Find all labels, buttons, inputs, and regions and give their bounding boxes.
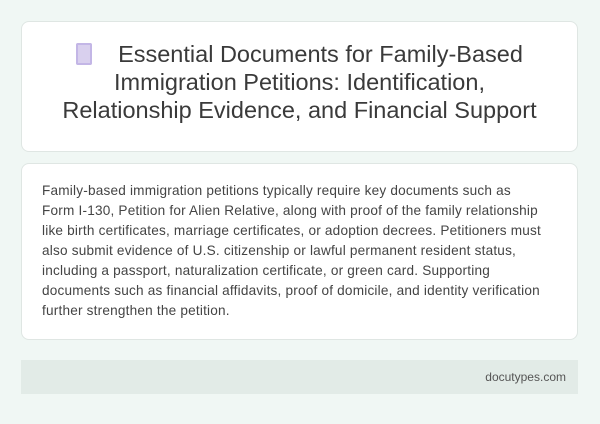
- title: [62, 41, 537, 123]
- text block: Form I-130, Petition for Alien Relative, along with proof of the family relationship: [42, 203, 538, 218]
- text block: like birth certificates, marriage certificates, or adoption decrees. Petitioners must: [42, 223, 541, 238]
- text block: including a passport, naturalization certificate, or green card. Supporting: [42, 263, 490, 278]
- text block: Family-based immigration petitions typically require key documents such as: [42, 183, 511, 198]
- title: Immigration Petitions: Identification,: [114, 69, 485, 95]
- panel: description: [21, 163, 578, 340]
- title: Relationship Evidence, and Financial Support: [62, 97, 537, 123]
- text block: also submit evidence of U.S. citizenship or lawful permanent resident status,: [42, 243, 516, 258]
- text block: documents such as financial affidavits, proof of domicile, and identity verification: [42, 283, 540, 298]
- icon: document: [76, 43, 92, 65]
- footer: [21, 360, 578, 394]
- text block: [42, 183, 541, 318]
- header panel: [21, 21, 578, 152]
- text block: further strengthen the petition.: [42, 303, 230, 318]
- title: Essential Documents for Family-Based: [118, 41, 523, 67]
- footer: docutypes.com: [485, 370, 566, 384]
